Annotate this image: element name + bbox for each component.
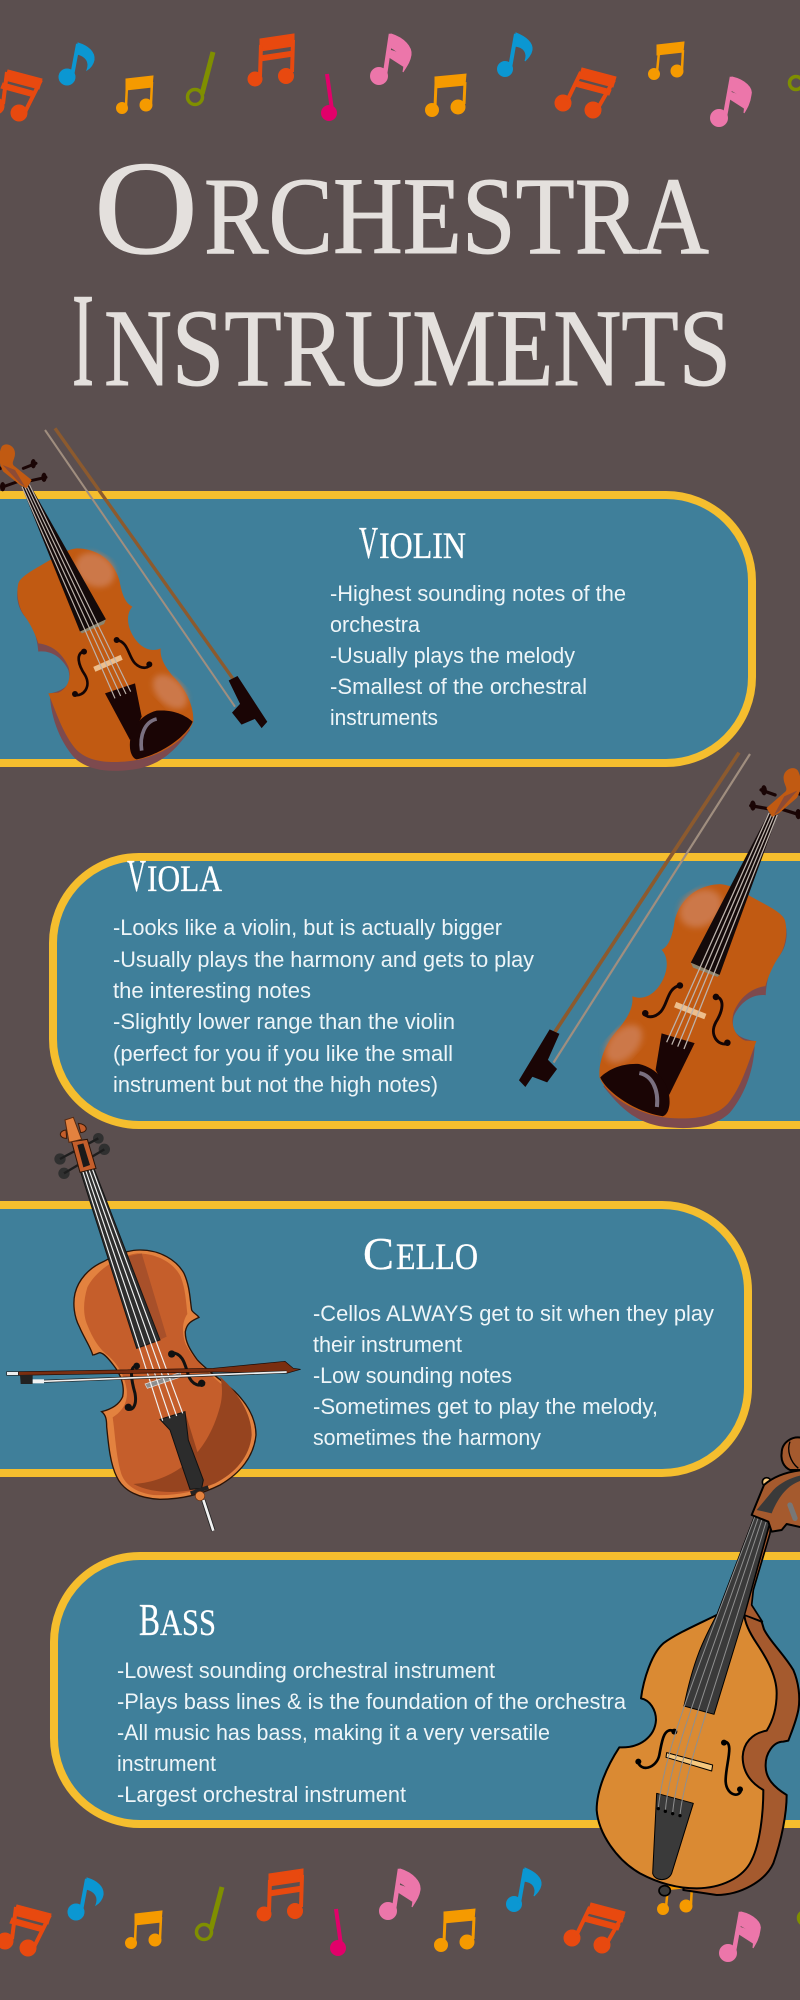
title: RCHESTRA <box>204 155 709 277</box>
text: cello facts: sometimes the harmony <box>313 1425 541 1450</box>
heading: viola <box>127 851 222 901</box>
heading: bass: B <box>139 1595 160 1645</box>
heading: cello <box>363 1229 478 1279</box>
text: violin facts: -Highest sounding notes of the <box>330 581 626 606</box>
text: violin facts: instruments <box>330 705 438 730</box>
text: bass facts: -Plays bass lines & is the foundation of the orchestra <box>117 1689 627 1714</box>
panel: cello <box>0 1205 748 1473</box>
text: viola facts: -Usually plays the harmony and gets to play <box>113 947 534 972</box>
heading: cello: C <box>363 1229 394 1279</box>
heading: violin <box>359 518 466 568</box>
text: violin facts <box>330 581 626 730</box>
heading: viola: IOLA <box>147 859 222 900</box>
text: bass facts: -All music has bass, making it a very versatile <box>117 1720 550 1745</box>
text: violin facts: -Usually plays the melody <box>330 643 575 668</box>
heading: violin: V <box>359 518 378 568</box>
top row of music notes <box>0 33 800 126</box>
text: violin facts: orchestra <box>330 612 421 637</box>
heading: bass <box>139 1595 216 1645</box>
panel: violin <box>0 495 752 763</box>
text: bass facts: -Largest orchestral instrument <box>117 1782 406 1807</box>
bottom row of music notes <box>0 1868 800 1962</box>
icon: violin with bow <box>0 428 267 771</box>
panel: viola <box>53 851 800 1125</box>
text: viola facts: -Looks like a violin, but is actually bigger <box>113 915 502 940</box>
panel: bass <box>54 1556 800 1824</box>
icon: cello with bow <box>7 1117 301 1531</box>
text: cello facts: -Low sounding notes <box>313 1363 512 1388</box>
text: bass facts: instrument <box>117 1751 216 1776</box>
text: bass facts: -Lowest sounding orchestral instrument <box>117 1658 495 1683</box>
text: cello facts: their instrument <box>313 1332 462 1357</box>
heading: cello: ELLO <box>396 1237 478 1278</box>
icon: double bass <box>597 1437 800 1896</box>
text: bass facts <box>117 1658 627 1807</box>
text: viola facts: instrument but not the high notes) <box>113 1072 438 1097</box>
text: viola facts <box>113 915 534 1097</box>
text: viola facts: -Slightly lower range than the violin <box>113 1009 455 1034</box>
text: cello facts: -Cellos ALWAYS get to sit when they play <box>313 1301 714 1326</box>
text: cello facts: -Sometimes get to play the melody, <box>313 1394 658 1419</box>
text: cello facts <box>313 1301 714 1450</box>
title: O <box>94 134 198 282</box>
text: viola facts: the interesting notes <box>113 978 311 1003</box>
text: violin facts: -Smallest of the orchestral <box>330 674 587 699</box>
heading: viola: V <box>127 851 146 901</box>
title: I <box>72 266 94 414</box>
icon: viola with bow <box>508 750 800 1134</box>
heading: violin: IOLIN <box>379 526 466 567</box>
heading: bass: ASS <box>160 1603 216 1644</box>
text: viola facts: (perfect for you if you like the small <box>113 1041 453 1066</box>
title <box>72 134 731 414</box>
